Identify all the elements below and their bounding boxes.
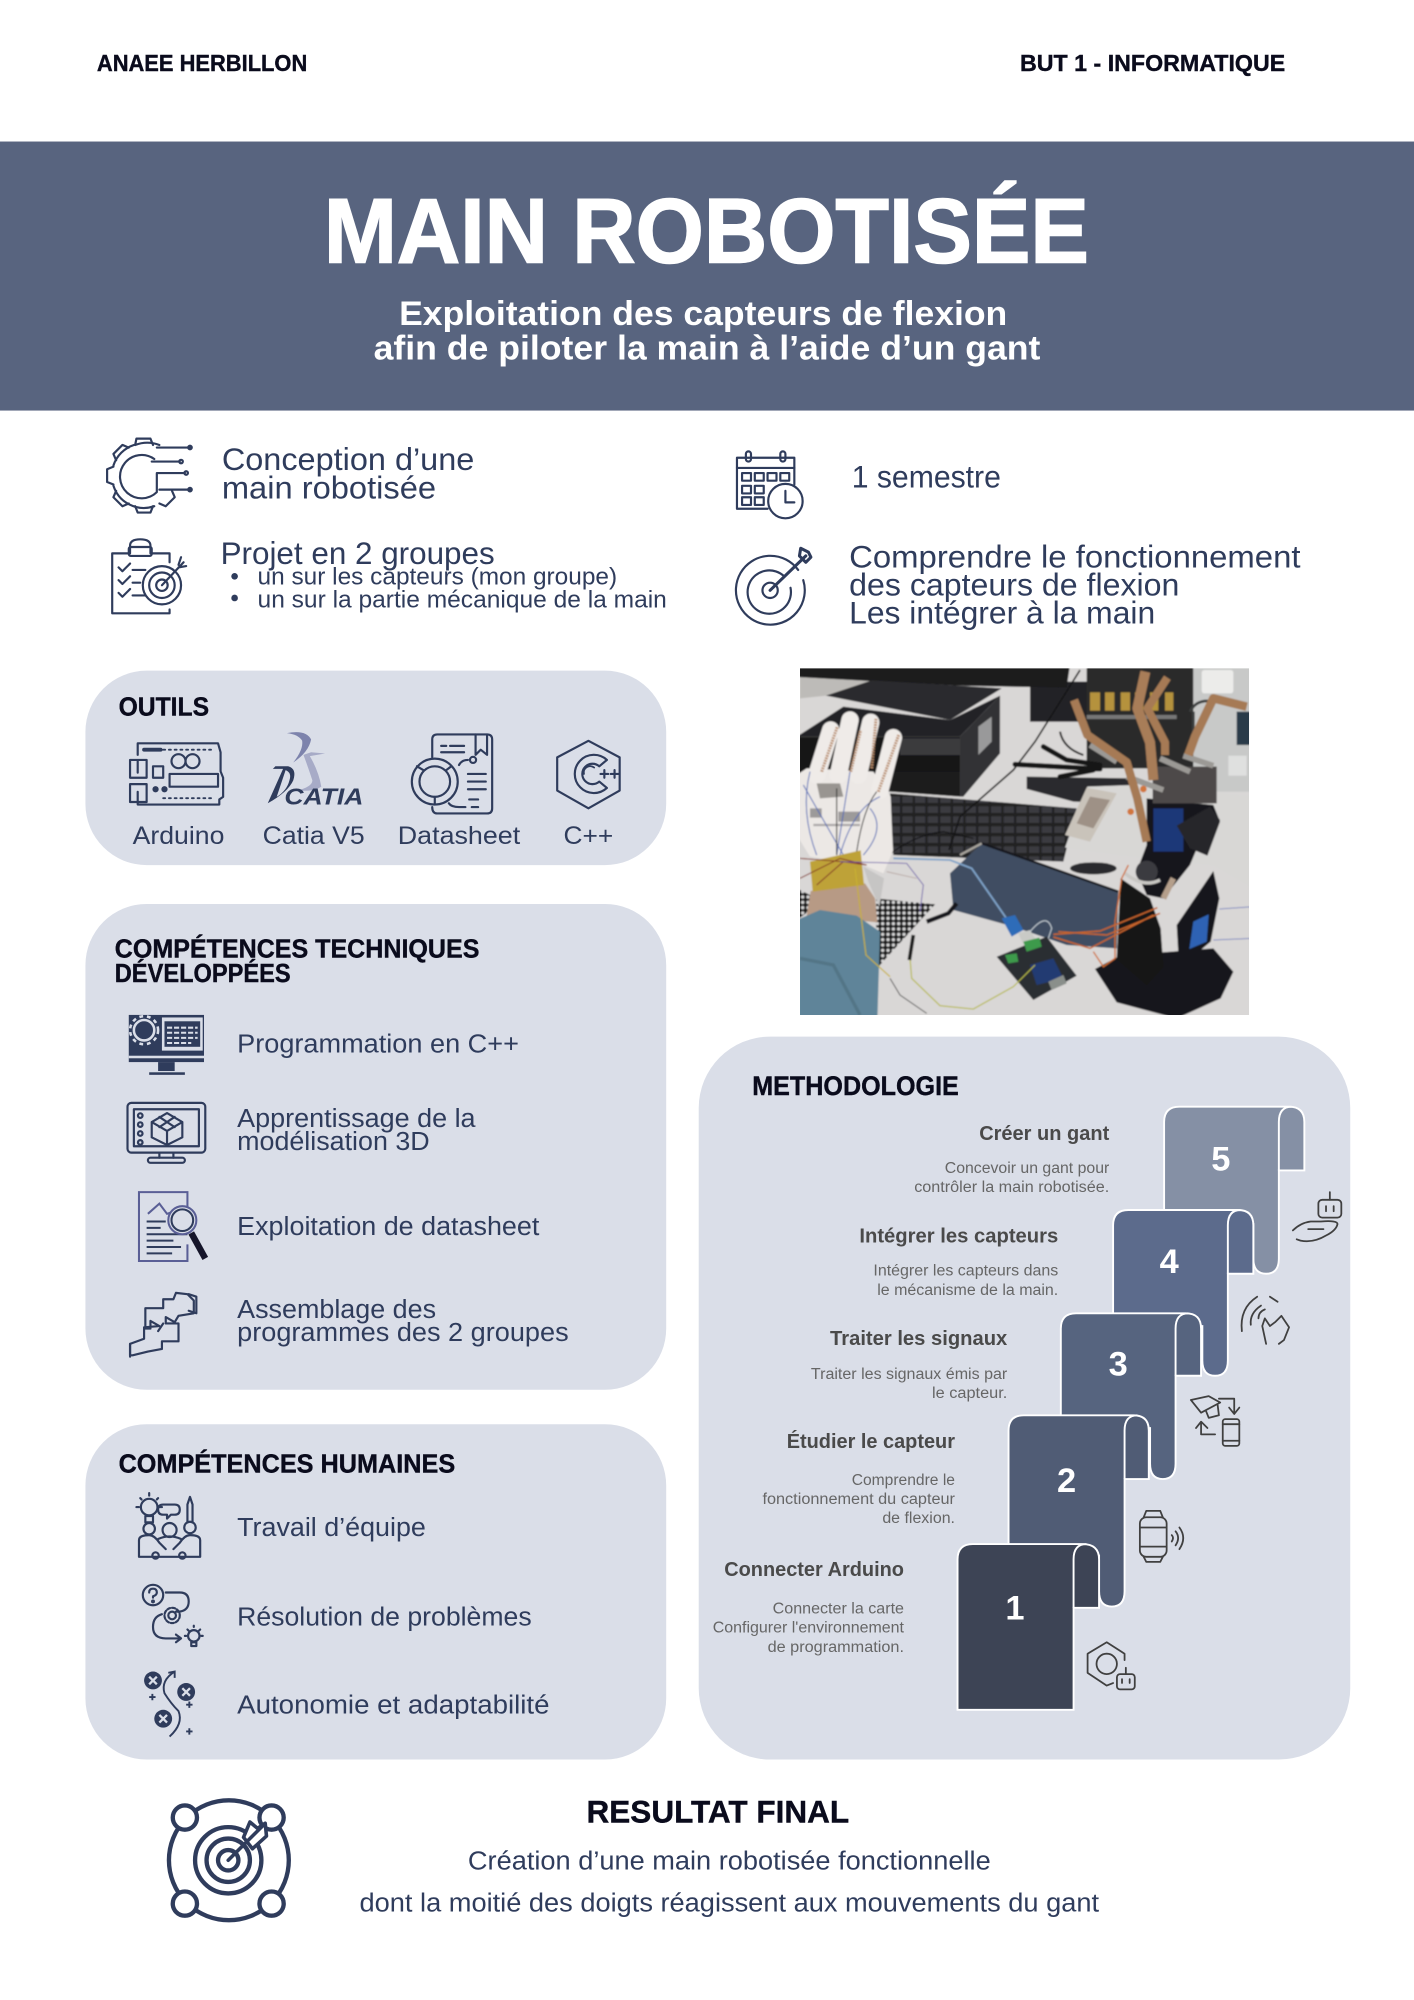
icon: robot in hand	[1293, 1192, 1341, 1241]
step 3 text: Traiter les signaux émis par	[811, 1366, 1007, 1383]
subtitle: Exploitation des capteurs de flexion	[399, 295, 1007, 333]
heading: compétences techniques: DÉVELOPPÉES	[115, 958, 291, 988]
icon: puzzle hands	[130, 1293, 196, 1357]
text: conception	[222, 441, 474, 505]
step 3 scroll	[1061, 1313, 1201, 1479]
heading: compétences techniques	[115, 934, 479, 988]
skill labels: Résolution de problèmes	[237, 1601, 532, 1631]
step 2 text: Étudier le capteur	[787, 1430, 955, 1453]
result text: Création d’une main robotisée fonctionnelle	[468, 1846, 991, 1876]
text: objectives	[849, 538, 1301, 630]
skill labels: Travail d’équipe	[237, 1512, 426, 1542]
icon: 3d modelling monitor	[128, 1103, 205, 1163]
step 4 text: Intégrer les capteurs	[859, 1226, 1058, 1248]
icon: calendar	[737, 451, 803, 518]
icon: smart watch	[1140, 1511, 1183, 1562]
icon: datasheet magnifier	[139, 1192, 205, 1261]
icon: datasheet	[412, 734, 492, 813]
step 5 text: Créer un gant	[979, 1123, 1109, 1145]
step numbers: 1	[1005, 1589, 1024, 1627]
step 1 text: Connecter Arduino	[724, 1559, 904, 1581]
skill labels: programmes des 2 groupes	[237, 1317, 569, 1347]
step numbers: 2	[1057, 1462, 1076, 1500]
text: conception: main robotisée	[222, 469, 436, 505]
step 2 scroll	[1009, 1415, 1149, 1607]
step numbers: 3	[1109, 1346, 1128, 1384]
photo: glove and robotic hand	[797, 662, 1253, 1022]
heading: méthodologie: METHODOLOGIE	[752, 1071, 959, 1101]
step 3 text	[811, 1328, 1008, 1402]
step 4 text: Intégrer les capteurs dans	[873, 1263, 1058, 1280]
icon: clipboard target	[112, 539, 186, 613]
step numbers: 4	[1160, 1243, 1179, 1281]
skill labels: Autonomie et adaptabilité	[237, 1689, 550, 1719]
title: MAIN ROBOTISÉE	[324, 180, 1089, 283]
subtitle: afin de piloter la main à l’aide d’un gant	[374, 330, 1041, 368]
icon: hex nut with robot	[1088, 1642, 1135, 1689]
skill labels	[237, 1028, 569, 1347]
step numbers: 5	[1211, 1140, 1230, 1178]
icon: touch gesture	[1242, 1297, 1289, 1344]
text: project groups: Projet en 2 groupes	[221, 535, 495, 571]
panel: outils	[85, 671, 666, 865]
icon: catia logo	[268, 732, 363, 810]
title banner	[0, 142, 1414, 411]
heading: outils: OUTILS	[119, 691, 209, 721]
result text: dont la moitié des doigts réagissent aux mouvements du gant	[360, 1888, 1100, 1918]
text: objectives: Comprendre le fonctionnement	[849, 538, 1301, 574]
step 5 text: Concevoir un gant pour	[945, 1160, 1109, 1177]
icon: problem solving	[143, 1585, 203, 1646]
skill labels	[237, 1512, 550, 1719]
heading: compétences humaines: COMPÉTENCES HUMAINES	[119, 1449, 455, 1479]
step 5 text	[914, 1123, 1109, 1196]
step 3 text: Traiter les signaux	[830, 1328, 1008, 1350]
panel: compétences techniques	[85, 904, 666, 1390]
step 5 scroll	[1164, 1107, 1304, 1274]
text: project groups	[221, 535, 667, 614]
step 2 text: de flexion.	[882, 1510, 955, 1527]
text: duration: 1 semestre	[852, 459, 1001, 495]
panel: méthodologie	[699, 1037, 1350, 1760]
text: objectives: des capteurs de flexion	[849, 566, 1179, 602]
icon: catia logo: CATIA	[284, 784, 363, 810]
icon: programming monitor	[129, 1015, 204, 1075]
icon: gear circuit	[107, 439, 192, 513]
step 4 text	[859, 1226, 1058, 1299]
skill labels: Programmation en C++	[237, 1028, 519, 1058]
icon: camera and phone	[1191, 1396, 1239, 1446]
subtitle	[374, 295, 1041, 368]
step 2 text	[762, 1430, 955, 1527]
icon: target	[736, 548, 811, 625]
tool labels: C++	[564, 822, 613, 850]
step 4 text: le mécanisme de la main.	[877, 1282, 1058, 1299]
tool labels: Datasheet	[398, 822, 520, 850]
result text	[360, 1846, 1100, 1918]
step 4 scroll	[1113, 1210, 1253, 1376]
skill labels: Exploitation de datasheet	[237, 1211, 540, 1241]
icon: teamwork	[136, 1493, 200, 1559]
icon: autonomy path	[144, 1672, 195, 1737]
step 1 text: de programmation.	[768, 1639, 904, 1656]
panel: compétences humaines	[85, 1424, 666, 1760]
tool labels: Arduino	[133, 822, 224, 850]
skill labels: modélisation 3D	[237, 1126, 430, 1156]
icon: arduino	[130, 743, 223, 805]
icon: final target	[169, 1800, 289, 1920]
skill labels: Assemblage des	[237, 1294, 436, 1324]
step 5 text: contrôler la main robotisée.	[914, 1179, 1109, 1196]
author name: ANAEE HERBILLON	[97, 50, 307, 76]
result heading: RESULTAT FINAL	[587, 1794, 849, 1830]
tool labels: Catia V5	[263, 822, 365, 850]
step 2 text: fonctionnement du capteur	[762, 1491, 955, 1508]
step numbers	[1005, 1140, 1230, 1627]
step 3 text: le capteur.	[932, 1385, 1007, 1402]
text: project groups: un sur les capteurs (mon groupe)	[258, 564, 617, 591]
tool labels	[133, 822, 613, 850]
text: objectives: Les intégrer à la main	[849, 594, 1155, 630]
text: conception: Conception d’une	[222, 441, 474, 477]
course label: BUT 1 - INFORMATIQUE	[1020, 50, 1285, 76]
text: project groups: un sur la partie mécanique de la main	[258, 587, 667, 614]
heading: compétences techniques: COMPÉTENCES TECHNIQUES	[115, 934, 479, 964]
step 1 text	[713, 1559, 905, 1656]
skill labels: Apprentissage de la	[237, 1103, 476, 1133]
icon: c++	[557, 741, 620, 808]
step 1 text: Configurer l'environnement	[713, 1620, 905, 1637]
step 1 scroll	[958, 1544, 1099, 1710]
step 2 text: Comprendre le	[852, 1472, 955, 1489]
step 1 text: Connecter la carte	[773, 1601, 904, 1618]
